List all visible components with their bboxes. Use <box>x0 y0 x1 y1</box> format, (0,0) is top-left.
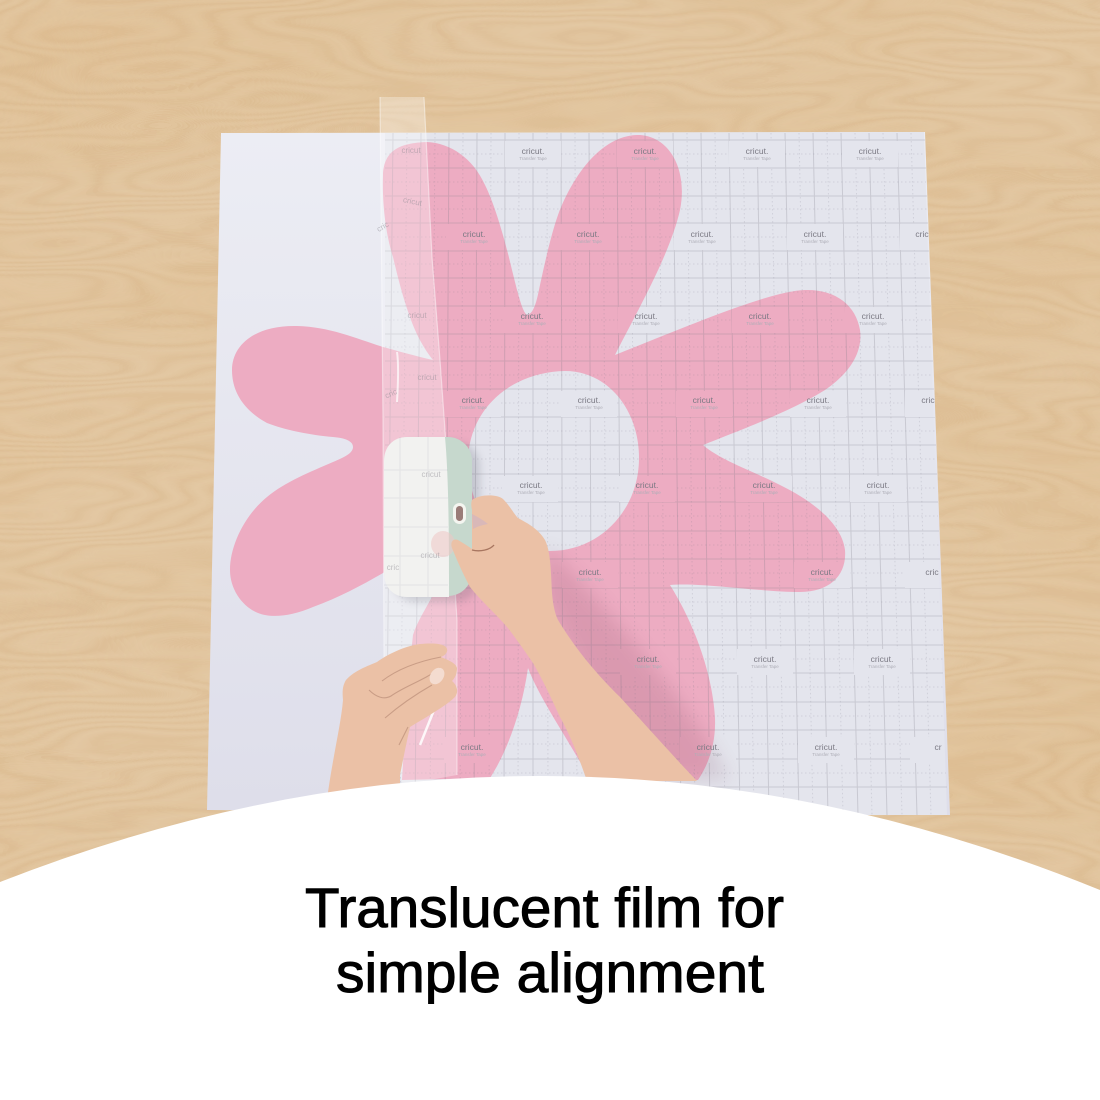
printed cricut logos <box>458 146 942 757</box>
printed cricut logos: cricut. <box>867 480 889 490</box>
pink flower vinyl <box>230 135 860 780</box>
printed cricut logos: cricut. <box>693 395 715 405</box>
printed cricut logos: Transfer Tape <box>574 239 602 244</box>
printed cricut logos: Transfer Tape <box>690 405 718 410</box>
printed cricut logos: cr <box>934 742 942 752</box>
printed cricut logos: cricut. <box>815 742 837 752</box>
printed cricut logos: cricut. <box>862 311 884 321</box>
printed cricut logos: Transfer Tape <box>694 752 722 757</box>
printed cricut logos: Transfer Tape <box>743 156 771 161</box>
printed cricut logos: Transfer Tape <box>519 156 547 161</box>
translucent film strip: cricut <box>401 146 421 155</box>
printed cricut logos: Transfer Tape <box>517 490 545 495</box>
translucent film strip: cricut <box>407 311 427 320</box>
upper hand and forearm <box>451 495 697 781</box>
translucent film strip: cricut <box>402 195 424 208</box>
printed cricut logos: cricut. <box>462 395 484 405</box>
squeegee tool: cric <box>387 563 399 572</box>
lower hand <box>327 643 457 800</box>
film fold near lower hand <box>420 665 452 745</box>
transfer tape sheet tint <box>385 132 947 815</box>
printed cricut logos: Transfer Tape <box>751 664 779 669</box>
printed cricut logos: cricut. <box>634 146 656 156</box>
printed cricut logos: Transfer Tape <box>458 752 486 757</box>
printed cricut logos: cricut. <box>859 146 881 156</box>
printed cricut logos: cricut. <box>461 742 483 752</box>
white curved caption panel <box>0 776 1100 1100</box>
printed cricut logos: Transfer Tape <box>633 490 661 495</box>
printed cricut logos: Transfer Tape <box>856 156 884 161</box>
printed cricut logos: cricut. <box>577 229 599 239</box>
printed cricut logos: Transfer Tape <box>632 321 660 326</box>
printed cricut logos: Transfer Tape <box>631 156 659 161</box>
printed cricut logos: Transfer Tape <box>804 405 832 410</box>
printed cricut logos: cricut. <box>520 480 542 490</box>
printed cricut logos: cric <box>921 395 935 405</box>
caption heading: Translucent film for <box>305 876 784 939</box>
paper sheet <box>207 132 950 815</box>
printed cricut logos: cricut. <box>746 146 768 156</box>
printed cricut logos: cricut. <box>804 229 826 239</box>
printed cricut logos: cricut. <box>691 229 713 239</box>
printed cricut logos: Transfer Tape <box>864 490 892 495</box>
printed cricut logos: cricut. <box>578 395 600 405</box>
printed cricut logos: cricut. <box>871 654 893 664</box>
printed cricut logos: cricut. <box>637 654 659 664</box>
printed cricut logos: cricut. <box>463 229 485 239</box>
caption heading: simple alignment <box>336 941 764 1004</box>
printed cricut logos: Transfer Tape <box>750 490 778 495</box>
printed cricut logos: cricut. <box>753 480 775 490</box>
translucent film strip: cric <box>383 387 398 400</box>
printed cricut logos: cric <box>925 567 939 577</box>
printed grid lines <box>385 133 947 815</box>
printed cricut logos: cric <box>915 229 929 239</box>
printed cricut logos: Transfer Tape <box>746 321 774 326</box>
printed cricut logos: cricut. <box>521 311 543 321</box>
printed cricut logos: cricut. <box>635 311 657 321</box>
printed cricut logos: cricut. <box>522 146 544 156</box>
printed cricut logos: cricut. <box>811 567 833 577</box>
translucent film strip: cricut <box>417 373 437 382</box>
printed cricut logos: Transfer Tape <box>634 664 662 669</box>
printed cricut logos: Transfer Tape <box>518 321 546 326</box>
printed cricut logos: Transfer Tape <box>460 239 488 244</box>
printed cricut logos: cricut. <box>807 395 829 405</box>
flower centre hole <box>468 371 639 551</box>
printed cricut logos: Transfer Tape <box>801 239 829 244</box>
printed cricut logos: cricut. <box>749 311 771 321</box>
translucent film strip: cric <box>375 220 390 234</box>
squeegee tool: cricut <box>421 470 441 479</box>
arm shadow on sheet <box>545 545 730 780</box>
squeegee tool <box>384 437 480 602</box>
printed cricut logos: cricut. <box>579 567 601 577</box>
printed cricut logos: cricut. <box>636 480 658 490</box>
translucent film strip <box>375 97 457 785</box>
printed cricut logos: Transfer Tape <box>688 239 716 244</box>
caption heading <box>305 876 784 1004</box>
printed cricut logos: cricut. <box>697 742 719 752</box>
printed cricut logos: Transfer Tape <box>808 577 836 582</box>
printed cricut logos: Transfer Tape <box>859 321 887 326</box>
printed cricut logos: Transfer Tape <box>575 405 603 410</box>
printed cricut logos: Transfer Tape <box>812 752 840 757</box>
printed cricut logos: Transfer Tape <box>868 664 896 669</box>
squeegee tool: cricut <box>420 551 440 560</box>
printed cricut logos: cricut. <box>754 654 776 664</box>
printed cricut logos: Transfer Tape <box>576 577 604 582</box>
printed cricut logos: Transfer Tape <box>459 405 487 410</box>
